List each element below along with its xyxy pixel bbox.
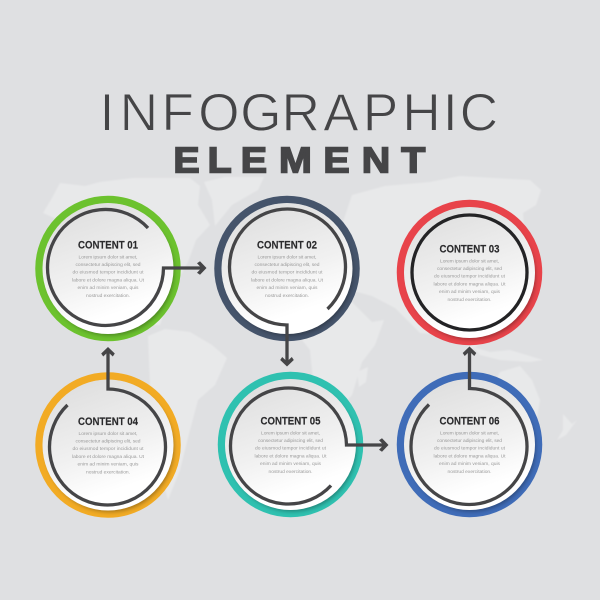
body text: labore et dolore magna aliqua. Ut xyxy=(434,282,506,288)
heading: CONTENT 03 xyxy=(440,244,500,256)
panel: content 01 xyxy=(39,200,207,338)
body text: consectetur adipiscing elit, sed xyxy=(258,438,323,444)
heading: CONTENT 04 xyxy=(78,416,139,428)
body text: do eiusmod tempor incididunt ut xyxy=(72,446,144,452)
heading: CONTENT 02 xyxy=(257,240,317,252)
arrow: spiral downward xyxy=(229,209,345,366)
body text xyxy=(254,430,327,475)
body text xyxy=(434,258,506,303)
heading: CONTENT 01 xyxy=(78,240,138,252)
panel: content 06 xyxy=(400,346,538,514)
panel: content 02 xyxy=(218,200,356,366)
body text xyxy=(72,254,145,299)
body text: Lorem ipsum dolor sit amet, xyxy=(440,430,499,436)
body text: do eiusmod tempor incididunt ut xyxy=(434,274,506,280)
panel: content 05 xyxy=(222,376,388,514)
heading: CONTENT 05 xyxy=(260,416,320,428)
body text: consectetur adipiscing elit, sed xyxy=(437,266,502,272)
ring: green xyxy=(39,200,177,338)
body text: labore et dolore magna aliqua. Ut xyxy=(72,278,145,284)
body text xyxy=(251,254,324,299)
arrow: spiral to right xyxy=(48,209,207,325)
body text: Lorem ipsum dolor sit amet, xyxy=(78,431,138,437)
body text: nostrud exercitation. xyxy=(86,293,130,299)
body text: nostrud exercitation. xyxy=(448,469,492,475)
body text: nostrud exercitation. xyxy=(265,293,309,299)
ring: red xyxy=(400,204,538,342)
body text xyxy=(72,431,145,475)
body text: do eiusmod tempor incididunt ut xyxy=(434,446,506,452)
subtitle: ELEMENT: ELEMENT xyxy=(173,141,425,181)
title: INFOGRAPHIC: INFOGRAPHIC xyxy=(100,84,498,142)
body text: nostrud exercitation. xyxy=(268,469,312,475)
body text: labore et dolore magna aliqua. Ut xyxy=(434,454,506,460)
body text: Lorem ipsum dolor sit amet, xyxy=(440,258,499,264)
body text: do eiusmod tempor incididunt ut xyxy=(72,270,144,276)
ring: navy xyxy=(218,200,356,338)
panel: content 04 xyxy=(39,347,177,514)
heading: CONTENT 06 xyxy=(440,416,500,428)
body text: nostrud exercitation. xyxy=(86,469,130,475)
body text: enim ad minim veniam, quis xyxy=(78,285,139,291)
body text: consectetur adipiscing elit, sed xyxy=(254,262,320,268)
body text: Lorem ipsum dolor sit amet, xyxy=(261,430,320,436)
ring: orange xyxy=(39,376,177,514)
body text: enim ad minim veniam, quis xyxy=(439,289,501,295)
body text: enim ad minim veniam, quis xyxy=(260,461,322,467)
panel: content 03 xyxy=(400,204,538,342)
body text: Lorem ipsum dolor sit amet, xyxy=(78,254,138,260)
body text: Lorem ipsum dolor sit amet, xyxy=(258,254,316,260)
ring: teal xyxy=(222,376,360,514)
arrow: spiral upward xyxy=(50,347,166,505)
world map xyxy=(43,176,577,500)
body text: labore et dolore magna aliqua. Ut xyxy=(72,454,145,460)
body text: consectetur adipiscing elit, sed xyxy=(76,262,141,268)
body text: enim ad minim veniam, quis xyxy=(256,285,318,291)
body text xyxy=(434,430,506,475)
body text: nostrud exercitation. xyxy=(448,297,492,303)
body text: consectetur adipiscing elit, sed xyxy=(76,438,141,444)
body text: do eiusmod tempor incididunt ut xyxy=(252,270,323,276)
body text: consectetur adipiscing elit, sed xyxy=(437,438,502,444)
inner circle outline xyxy=(412,215,527,330)
ring: blue xyxy=(400,376,538,514)
body text: labore et dolore magna aliqua. Ut xyxy=(254,454,327,460)
body text: enim ad minim veniam, quis xyxy=(439,461,501,467)
arrow: spiral to right xyxy=(231,388,388,504)
body text: labore et dolore magna aliqua. Ut xyxy=(251,278,324,284)
body text: enim ad minim veniam, quis xyxy=(78,462,139,468)
body text: do eiusmod tempor incididunt ut xyxy=(255,446,327,452)
arrow: spiral upward xyxy=(411,346,527,504)
